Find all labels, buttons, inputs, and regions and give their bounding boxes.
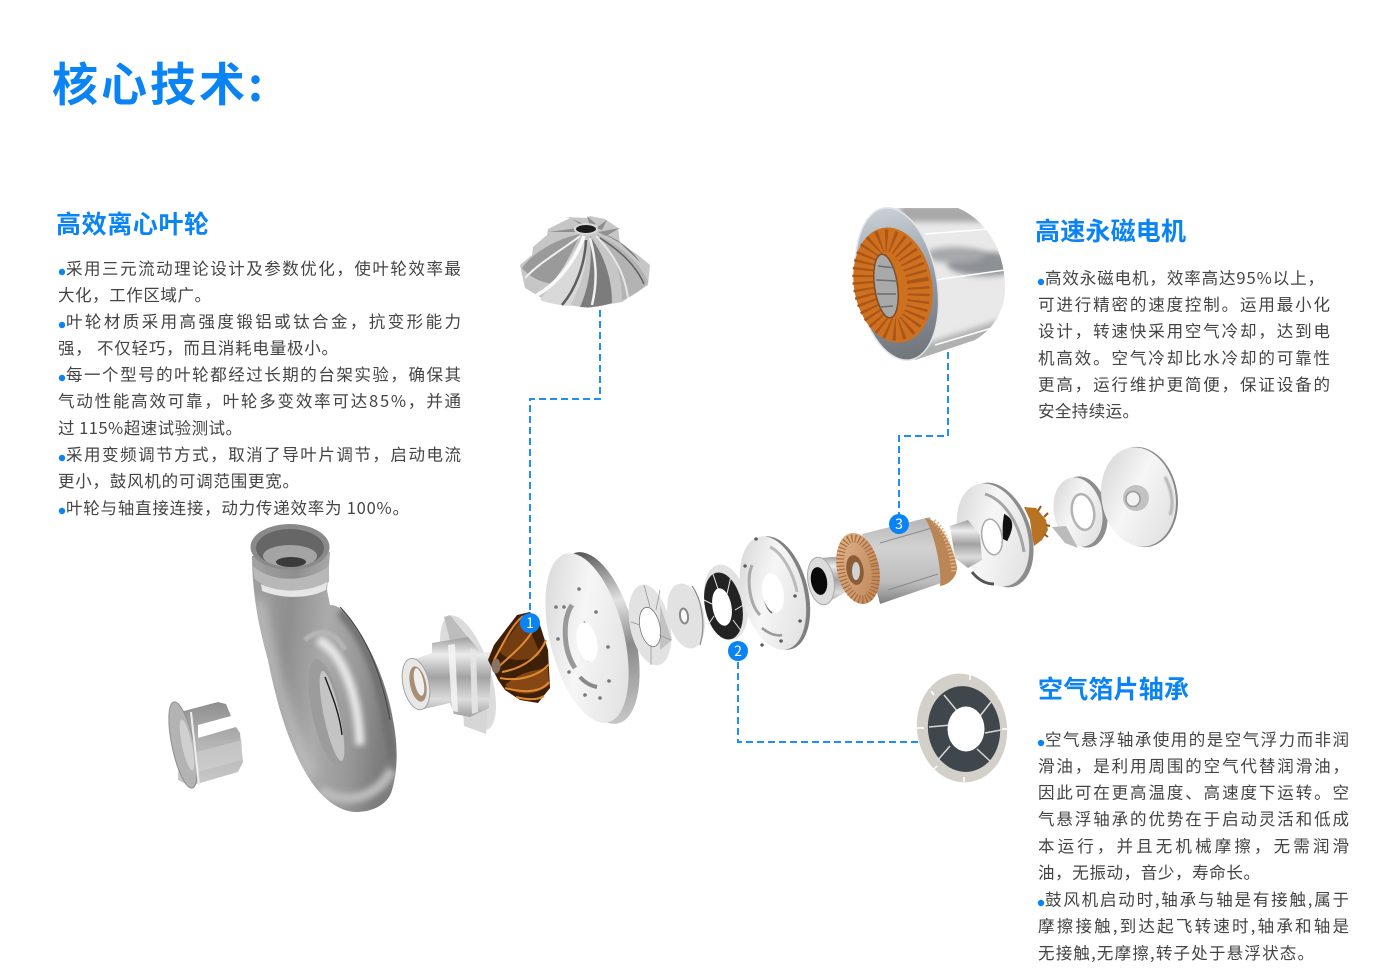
panel: bearing description [1038, 670, 1349, 964]
icon: motor rotor [830, 517, 957, 608]
panel: impeller description [56, 205, 461, 519]
icon: foil plate [622, 581, 678, 669]
marker 2: 2 [734, 641, 742, 661]
text block: impeller points: 每一个型号的叶轮都经过长期的台架实验，确保其 [66, 362, 461, 386]
icon: mounting flange [729, 529, 821, 657]
title: 核心技术: [52, 49, 263, 115]
heading: impeller: 高效离心叶轮 [56, 205, 209, 241]
icon: foil bearing [910, 668, 1014, 788]
marker 2 [728, 641, 748, 661]
text block: motor points: 高效永磁电机，效率高达95%以上， [1045, 265, 1324, 289]
marker 3: 3 [895, 514, 903, 534]
text block: bearing points: 无接触,无摩擦,转子处于悬浮状态。 [1038, 940, 1314, 964]
icon: motor stator [852, 207, 1005, 361]
text block: impeller points: 强， 不仅轻巧，而且消耗电量极小。 [58, 335, 338, 359]
text block: bearing points: 空气悬浮轴承使用的是空气浮力而非润 [1045, 726, 1349, 750]
text block: motor points: 机高效。空气冷却比水冷却的可靠性 [1038, 345, 1330, 369]
text block: motor points [1038, 265, 1330, 422]
text block: bearing points: 因此可在更高温度、高速度下运转。空 [1038, 780, 1349, 804]
text block: impeller points: 采用变频调节方式，取消了导叶片调节，启动电流 [66, 442, 461, 466]
text block: impeller points: 采用三元流动理论设计及参数优化，使叶轮效率最 [66, 256, 461, 280]
text block: impeller points [58, 256, 461, 519]
text block: impeller points: 气动性能高效可靠，叶轮多变效率可达85%，并通 [58, 388, 461, 412]
text block: impeller points: 叶轮与轴直接连接，动力传递效率为 100%。 [66, 495, 409, 519]
icon: seal ring [1047, 472, 1114, 552]
icon: copper impeller [488, 612, 550, 703]
panel: motor description [1035, 212, 1330, 422]
heading: bearing: 空气箔片轴承 [1038, 670, 1189, 706]
marker 1 [520, 613, 540, 633]
text block: bearing points: 本运行，并且无机械摩擦，无需润滑 [1038, 833, 1349, 857]
marker 1: 1 [526, 613, 534, 633]
text block: impeller points: 过 115%超速试验测试。 [58, 415, 242, 439]
text block: motor points: 安全持续运。 [1038, 398, 1139, 422]
arrow: connector motor to part 3 [899, 352, 948, 515]
icon: silver impeller [520, 216, 650, 308]
icon: shaft sleeve [804, 555, 850, 607]
icon: volute housing [250, 524, 397, 812]
text block: impeller points: 大化，工作区域广。 [58, 282, 211, 306]
text block: impeller points: 叶轮材质采用高强度锻铝或钛合金，抗变形能力 [66, 308, 461, 332]
icon: thrust disc [662, 580, 710, 652]
text block: bearing points: 摩擦接触,到达起飞转速时,轴承和轴是 [1038, 913, 1349, 937]
icon: bearing housing [398, 609, 507, 737]
heading: motor: 高速永磁电机 [1035, 212, 1186, 248]
arrow: connector impeller to part 1 [530, 310, 600, 615]
text block: motor points: 更高，运行维护更简便，保证设备的 [1038, 372, 1330, 396]
icon: large flange disc [530, 543, 655, 733]
text block: bearing points [1038, 726, 1349, 964]
text block: bearing points: 气悬浮轴承的优势在于启动灵活和低成 [1038, 806, 1349, 830]
icon: black foil ring [698, 560, 754, 644]
icon: small sleeve [163, 700, 243, 790]
marker 3 [889, 514, 909, 534]
text block: motor points: 可进行精密的速度控制。运用最小化 [1038, 292, 1330, 316]
text block: impeller points: 更小，鼓风机的可调范围更宽。 [58, 468, 299, 492]
text block: motor points: 设计，转速快采用空气冷却，达到电 [1038, 318, 1330, 342]
text block: bearing points: 油，无振动，音少，寿命长。 [1038, 860, 1260, 884]
text block: bearing points: 鼓风机启动时,轴承与轴是有接触,属于 [1045, 886, 1349, 910]
icon: end plate [1093, 441, 1186, 553]
icon: small copper wheel [1024, 506, 1050, 546]
text block: bearing points: 滑油，是利用周围的空气代替润滑油， [1038, 753, 1349, 777]
icon: rear flange [944, 473, 1046, 597]
arrow: connector bearing to part 2 [738, 662, 918, 742]
